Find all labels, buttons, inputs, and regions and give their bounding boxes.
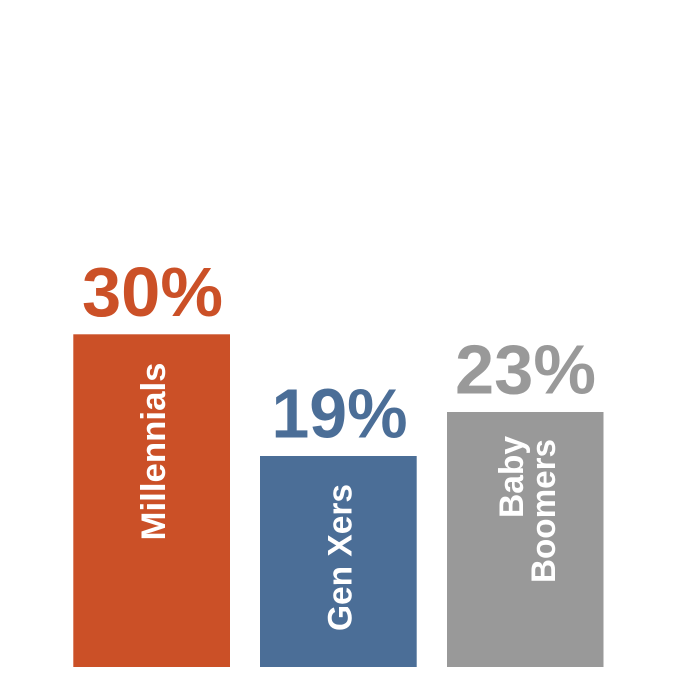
bar group: Baby Boomers xyxy=(447,330,604,667)
label: Baby Boomers: Baby xyxy=(493,436,531,518)
label: Baby Boomers xyxy=(493,436,563,583)
bar group: Millennials xyxy=(73,253,230,667)
value: 23%: 23% xyxy=(455,330,596,408)
label: Gen Xers: Gen Xers xyxy=(322,484,360,631)
bar group: Gen Xers xyxy=(260,374,417,667)
value: 30%: 30% xyxy=(82,253,223,331)
label: Baby Boomers: Boomers xyxy=(525,439,563,583)
bar: Millennials xyxy=(73,334,230,667)
bar: Baby Boomers xyxy=(447,412,604,667)
label: Millennials: Millennials xyxy=(135,362,173,541)
value: 19%: 19% xyxy=(272,374,408,452)
bar: Gen Xers xyxy=(260,456,417,667)
